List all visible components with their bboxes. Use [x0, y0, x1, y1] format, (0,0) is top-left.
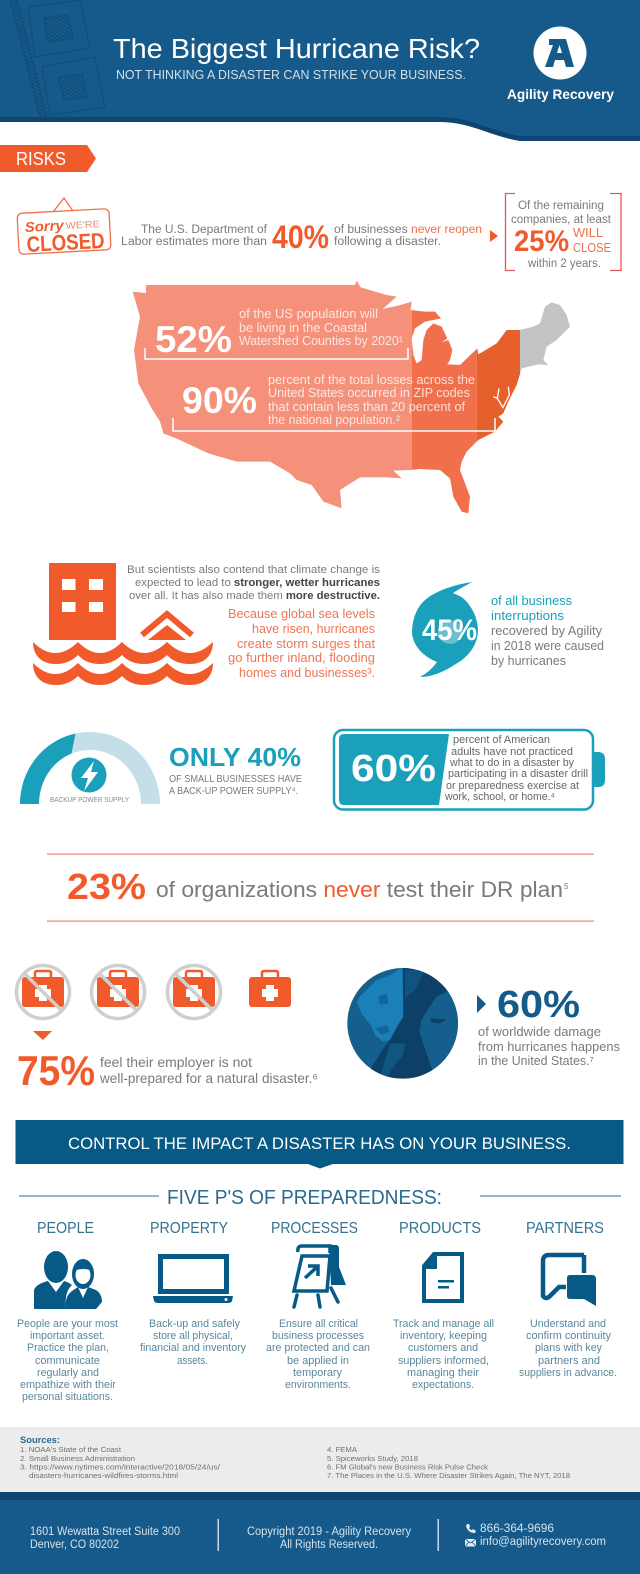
icon: document	[422, 1254, 462, 1301]
column: people	[17, 1220, 118, 1403]
sources panel: 1. NOAA's State of the Coast	[20, 1445, 122, 1454]
stat: 75% employer not prepared	[17, 1047, 318, 1094]
address: 1601 Wewatta Street Suite 300	[30, 1526, 180, 1538]
section tag: risks: RISKS	[16, 149, 66, 169]
text: 45% of business interruptions: recovered by Agility	[491, 624, 603, 638]
sources panel: 4. FEMA	[327, 1445, 358, 1454]
battery: 60% have not practiced: adults have not practiced	[451, 746, 573, 758]
icon: people	[34, 1251, 102, 1309]
callout: 25% will close: Of the remaining	[518, 200, 604, 212]
logo: Agility Recovery	[507, 26, 614, 102]
copyright	[247, 1526, 411, 1551]
column: partners: Understand and	[530, 1318, 606, 1330]
stat: only 40% have back-up power: A BACK-UP POWER SUPPLY⁴.	[169, 786, 298, 797]
column: products: customers and	[408, 1342, 478, 1354]
text: sea levels and storm surges: create storm surges that	[237, 637, 376, 651]
column: partners: confirm continuity	[526, 1330, 612, 1342]
stat: 40% of businesses never reopen	[121, 219, 482, 255]
icon: laptop	[153, 1256, 233, 1303]
contact details	[480, 1523, 606, 1548]
column: processes	[266, 1220, 370, 1391]
contact details: info@agilityrecovery.com	[480, 1536, 606, 1548]
icon: hurricane with 45%: 45%	[422, 614, 477, 647]
text: climate change: over all. It has also made them more destructive.	[129, 590, 380, 602]
arrow	[490, 230, 498, 242]
stat: 75% employer not prepared: 75%	[17, 1047, 95, 1094]
text: 45% of business interruptions: in 2018 were caused	[491, 639, 604, 653]
callout: 25% will close: CLOSE	[573, 240, 611, 255]
sources panel: 5. Spiceworks Study, 2018	[327, 1454, 418, 1463]
column: property: Back-up and safely	[149, 1318, 241, 1330]
callout: 25% will close: 25%	[514, 225, 569, 258]
column: partners: suppliers in advance.	[519, 1367, 617, 1379]
text: sea levels and storm surges: homes and businesses³.	[239, 666, 375, 680]
text: 45% of business interruptions	[491, 594, 604, 668]
stat: 52% of US population	[145, 306, 408, 360]
sources panel	[0, 1427, 640, 1492]
arrow	[477, 995, 486, 1013]
stat: 75% employer not prepared: feel their employer is not	[100, 1054, 252, 1070]
text: climate change: But scientists also contend that climate change is	[127, 564, 380, 576]
column: partners	[519, 1220, 617, 1379]
text: 45% of business interruptions: of all business	[491, 594, 572, 608]
text: 45% of business interruptions: interruptions	[491, 609, 564, 623]
column: people: communicate	[35, 1355, 100, 1367]
column: products	[393, 1220, 494, 1391]
stat: 40% of businesses never reopen: 40%	[272, 219, 329, 255]
text: climate change: expected to lead to stronger, wetter hurricanes	[135, 577, 380, 589]
column: products: managing their	[407, 1367, 479, 1379]
column: property: financial and inventory	[140, 1342, 247, 1354]
battery: 60% have not practiced: percent of American	[453, 734, 550, 746]
footer	[0, 1492, 640, 1574]
callout: 25% will close: WILL	[573, 225, 603, 240]
icon: chat bubbles	[543, 1255, 596, 1306]
stat: 52% of US population: 52%	[155, 319, 232, 360]
contact details: 866-364-9696	[480, 1523, 554, 1535]
sources panel: 3. https://www.nytimes.com/interactive/2018/05/24/us/	[20, 1462, 221, 1472]
column: products: inventory, keeping	[400, 1330, 487, 1342]
gauge: backup power supply	[20, 732, 160, 804]
battery: 60% have not practiced: participating in a disaster drill	[448, 768, 588, 780]
stat: 40% of businesses never reopen: following a disaster.	[334, 236, 441, 248]
address	[30, 1526, 180, 1551]
subtitle: NOT THINKING A DISASTER CAN STRIKE YOUR BUSINESS.	[116, 68, 466, 82]
icon: crossed kit 2	[92, 966, 144, 1018]
stat: 40% of businesses never reopen: of businesses never reopen	[334, 224, 482, 236]
column: products: expectations.	[412, 1379, 474, 1391]
column: processes: business processes	[272, 1330, 365, 1342]
text: sea levels and storm surges: Because global sea levels	[228, 607, 375, 621]
column: property	[140, 1220, 247, 1367]
stat: 90% of total losses	[173, 372, 495, 431]
stat: 52% of US population: of the US population will	[239, 306, 378, 321]
stat: 40% of businesses never reopen: The U.S. Department of	[141, 224, 268, 236]
column: processes: temporary	[293, 1367, 343, 1379]
stat: only 40% have back-up power: ONLY 40%	[169, 742, 301, 772]
text: sea levels and storm surges	[228, 607, 376, 680]
sources panel: 7. The Places in the U.S. Where Disaster Strikes Again, The NYT, 2018	[327, 1471, 570, 1480]
sources panel: disasters-hurricanes-wildfires-storms.html	[29, 1471, 178, 1480]
stat: 40% of businesses never reopen: Labor estimates more than	[121, 236, 267, 248]
column: products: PRODUCTS	[399, 1220, 481, 1237]
sources panel: 2. Small Business Administration	[20, 1454, 135, 1463]
address: Denver, CO 80202	[30, 1539, 119, 1551]
column: partners: PARTNERS	[526, 1220, 604, 1237]
arrow	[33, 1031, 52, 1040]
header band	[0, 0, 640, 141]
column: people: PEOPLE	[37, 1220, 94, 1237]
copyright: Copyright 2019 - Agility Recovery	[247, 1526, 411, 1538]
gauge: backup power supply: BACKUP POWER SUPPLY	[50, 795, 129, 804]
icon: sorry we're closed sign: WE'RE	[65, 219, 100, 232]
column: people: regularly and	[37, 1367, 99, 1379]
icon: hurricane with 45%	[412, 582, 478, 677]
logo: Agility Recovery: Agility Recovery	[507, 86, 614, 102]
icon: boarded up windows sketch	[10, 0, 105, 117]
column: products: Track and manage all	[393, 1318, 494, 1330]
sources panel: 6. FM Global's new Business Risk Pulse Check	[327, 1462, 488, 1472]
icon: flooded building and house	[28, 563, 218, 685]
callout: 25% will close	[506, 194, 621, 270]
stat: only 40% have back-up power	[169, 742, 302, 797]
icon: power bolt	[72, 758, 106, 792]
column: people: personal situations.	[22, 1391, 113, 1403]
stat: 90% of total losses: the national population.²	[268, 412, 401, 427]
icon: phone	[466, 1524, 476, 1533]
stat: 52% of US population: Watershed Counties by 2020¹	[239, 333, 404, 348]
column: processes: PROCESSES	[271, 1220, 358, 1237]
callout: 25% will close: within 2 years.	[527, 258, 601, 270]
title: The Biggest Hurricane Risk?	[113, 33, 480, 64]
text: climate change	[127, 564, 380, 602]
banner: 23% never test DR plan: of organizations never test their DR plan	[156, 877, 563, 902]
stat: 90% of total losses: 90%	[182, 380, 257, 421]
battery: 60% have not practiced: work, school, or home.⁴	[444, 791, 555, 803]
stat: 52% of US population: be living in the Coastal	[239, 320, 367, 335]
stat: 60% of worldwide damage: from hurricanes happens	[478, 1039, 620, 1054]
stat: 75% employer not prepared: well-prepared for a natural disaster.⁶	[99, 1070, 318, 1086]
battery: 60% have not practiced	[334, 730, 605, 810]
column: processes: are protected and can	[266, 1342, 370, 1354]
callout: 25% will close: companies, at least	[511, 214, 612, 226]
icon: mail	[465, 1539, 476, 1546]
banner: control the impact: CONTROL THE IMPACT A DISASTER HAS ON YOUR BUSINESS.	[68, 1135, 571, 1153]
text: sea levels and storm surges: have risen, hurricanes	[252, 622, 375, 636]
column: products: suppliers informed,	[398, 1355, 489, 1367]
text: 45% of business interruptions: by hurricanes	[491, 654, 566, 668]
column: people: People are your most	[17, 1318, 118, 1330]
column: processes: Ensure all critical	[279, 1318, 358, 1330]
banner: 23% never test DR plan: 5	[564, 882, 569, 891]
section tag: risks	[0, 145, 96, 172]
battery: 60% have not practiced: 60%	[351, 748, 436, 790]
column: people: important asset.	[30, 1330, 105, 1342]
stat: 60% of worldwide damage	[478, 984, 620, 1068]
icons: three crossed-out first aid kits and one kit	[16, 966, 291, 1018]
battery: 60% have not practiced: or preparedness exercise at	[446, 780, 579, 792]
column: partners: plans with key	[535, 1342, 603, 1354]
stat: 90% of total losses: United States occurred in ZIP codes	[268, 385, 470, 400]
sources panel: Sources:	[20, 1435, 60, 1446]
column: property: store all physical,	[153, 1330, 233, 1342]
column: people: Practice the plan,	[27, 1342, 109, 1354]
column: property: assets.	[177, 1355, 208, 1367]
column: people: empathize with their	[20, 1379, 116, 1391]
column: processes: environments.	[285, 1379, 351, 1391]
icon: sorry we're closed sign: CLOSED	[26, 228, 105, 257]
stat: 60% of worldwide damage: 60%	[497, 984, 580, 1026]
column: property: PROPERTY	[150, 1220, 228, 1237]
icon: kit 4	[249, 971, 291, 1007]
icon: sorry we're closed sign	[17, 198, 111, 257]
icon: globe	[347, 968, 458, 1079]
banner: control the impact	[16, 1120, 624, 1168]
column: processes: be applied in	[287, 1355, 349, 1367]
stat: only 40% have back-up power: OF SMALL BUSINESSES HAVE	[169, 774, 302, 785]
battery: 60% have not practiced: what to do in a disaster by	[449, 757, 574, 769]
map: United States coastal risk	[132, 280, 570, 514]
stat: 90% of total losses: percent of the total losses across the	[268, 372, 475, 387]
stat: 90% of total losses: that contain less than 20 percent of	[268, 399, 465, 414]
icon: flip chart	[294, 1245, 346, 1307]
stat: 60% of worldwide damage: of worldwide damage	[478, 1024, 601, 1039]
text: sea levels and storm surges: go further inland, flooding	[228, 651, 375, 665]
column: partners: partners and	[538, 1355, 600, 1367]
banner: 23% never test DR plan: 23%	[67, 866, 146, 907]
stat: 60% of worldwide damage: in the United States.⁷	[478, 1053, 594, 1068]
banner: 23% never test DR plan	[47, 854, 594, 922]
heading: five P's of preparedness: FIVE P'S OF PREPAREDNESS:	[167, 1186, 442, 1209]
icon: sorry we're closed sign: Sorry	[24, 217, 65, 235]
copyright: All Rights Reserved.	[280, 1539, 378, 1551]
icon: crossed kit 1	[16, 966, 70, 1018]
icon: crossed kit 3	[168, 966, 220, 1018]
